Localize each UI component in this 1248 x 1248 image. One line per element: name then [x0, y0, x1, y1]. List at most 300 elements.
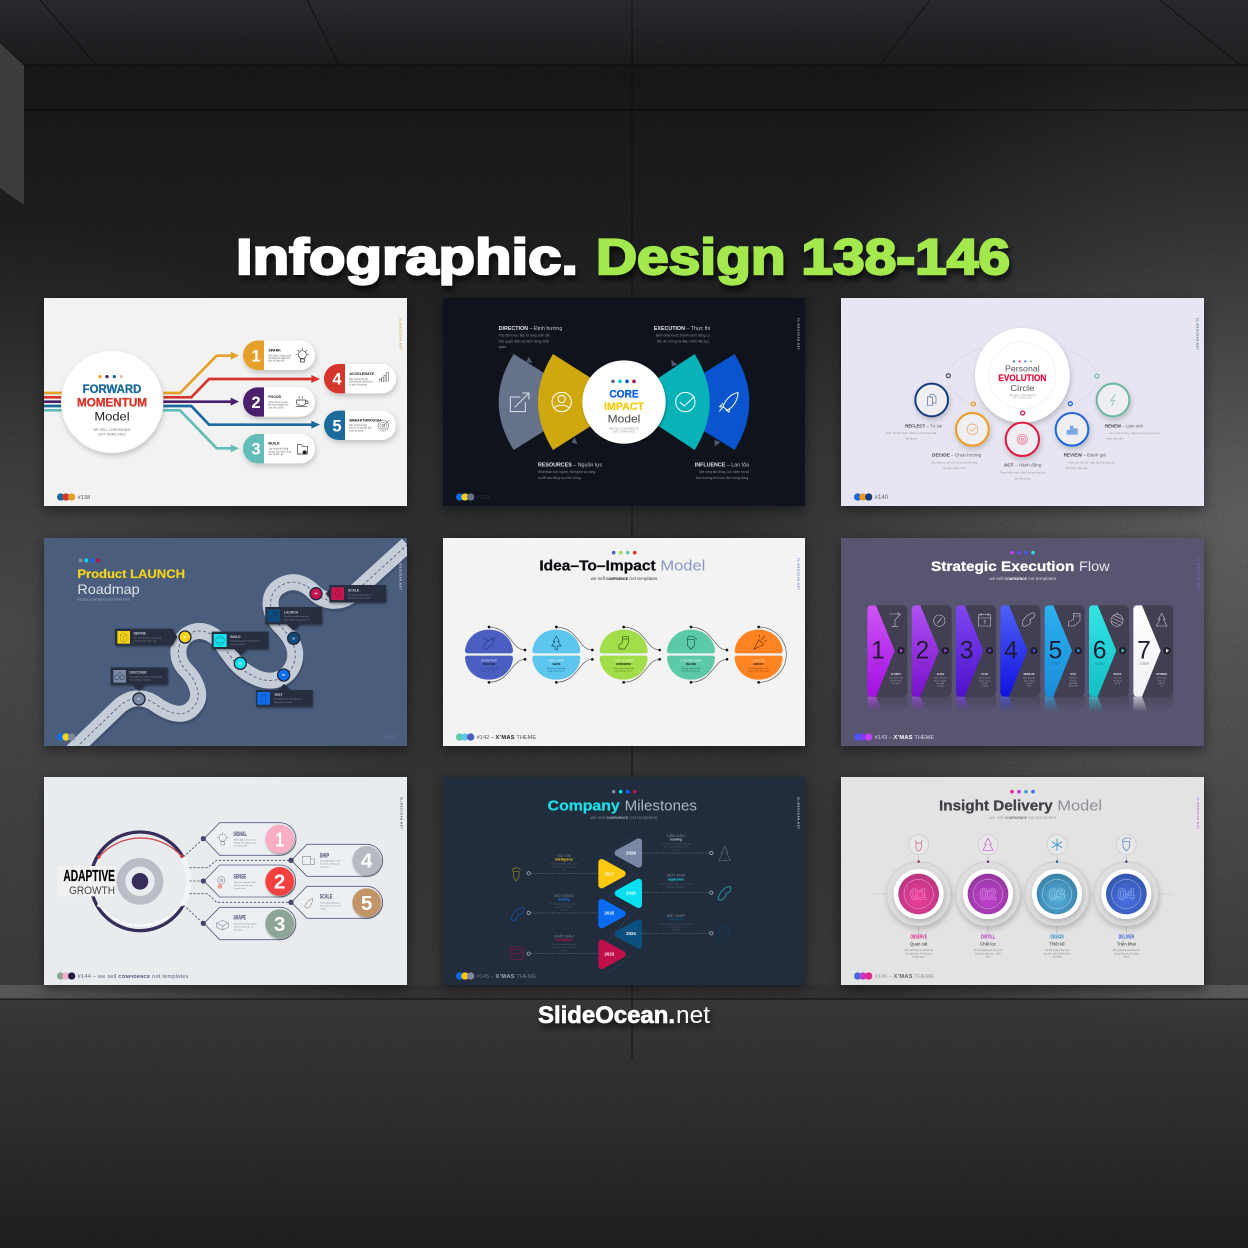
orbit ellipse [947, 343, 1097, 413]
heading: Model [660, 558, 705, 574]
panel 146: Insight Delivery Model [841, 777, 1204, 985]
footer id [57, 733, 397, 741]
panel 140: Personal Evolution Circle [841, 298, 1204, 506]
stage 03 design: 03 [1048, 887, 1066, 904]
panel 143: Strategic Execution Flow [841, 538, 1204, 746]
step 7: 7 [1137, 638, 1151, 665]
step 7: trình sau [1158, 679, 1166, 682]
step build: BUILD [230, 635, 241, 639]
stage 04 deliver [1094, 835, 1158, 959]
step 6 [1089, 605, 1129, 697]
stage 03 design [1025, 835, 1089, 959]
step 3 build: 3 [251, 440, 261, 459]
reflect node [886, 384, 948, 441]
step 1: Làm rõ mục tiêu [889, 677, 903, 680]
stage 2: pháp có cấu trúc rõ [549, 670, 564, 673]
central circle: IMPACT [604, 401, 644, 413]
stage 3 [600, 626, 661, 684]
step scale: SCALE [348, 589, 360, 593]
connecting line [873, 893, 1172, 895]
step 5 [1045, 605, 1085, 697]
milestone 2024: BẮT NHỊP [667, 913, 686, 918]
milestone 2023 [511, 933, 622, 966]
step 7: STEP [1140, 662, 1150, 666]
step 3 build [243, 434, 315, 463]
footer id: #140 [875, 495, 889, 501]
renew node: RENEW – Làm mới [1105, 424, 1143, 429]
step 5 scale: hiệu quả và tối ưu hệ [320, 904, 341, 907]
step 2 sense: sự phía sau [234, 888, 246, 890]
step 5: thống nhất [1068, 685, 1078, 688]
orbit nodes [946, 374, 1099, 415]
milestone 2027: SỰ TIN [557, 853, 571, 858]
step 4 accelerate: ACCELERATE [349, 372, 375, 376]
milestone 2026: expansion [668, 877, 684, 881]
brand vertical text: SLIDEOCEAN.NET [1196, 318, 1199, 350]
step 4: thiết [1027, 685, 1031, 688]
central circle: WE SELL CONFIDENCE [609, 426, 639, 430]
heading: Milestones [625, 798, 697, 814]
step 5 scale: SCALE [320, 894, 332, 901]
step 6: chỉ số [1115, 682, 1121, 685]
title [236, 229, 1010, 285]
footer id [57, 972, 189, 980]
central circle [61, 351, 163, 453]
direction text: DIRECTION – Định hướng [499, 326, 562, 332]
central circle: NOT TEMPLATES [613, 430, 635, 434]
central circle [975, 328, 1070, 423]
footer id [854, 493, 889, 501]
influence text: INFLUENCE – Lan tỏa [695, 461, 749, 468]
brand vertical text: SLIDEOCEAN.NET [797, 318, 800, 350]
act node: Thực hiện nhất quán những việc tạo [1000, 471, 1046, 475]
step 1 spark [243, 341, 315, 370]
stage 03 design: tác động [1053, 956, 1062, 959]
step 2: hướng [937, 686, 943, 688]
footer id [57, 493, 90, 501]
stage 04 deliver: được [1124, 956, 1130, 959]
panel 144: Adaptive Growth [44, 777, 407, 985]
heading [939, 790, 1102, 820]
resources text: cụ để tạo động lực bền vững. [538, 476, 582, 480]
step build: Xây dựng nguyên mẫu, kiểm thử [230, 640, 260, 643]
panel 145: Company Milestones [443, 777, 805, 985]
milestone 2023: foundation [555, 938, 573, 942]
step 1 signal: SIGNAL [233, 831, 247, 838]
step 1 spark: tạo động lực đầu tiên [268, 357, 291, 360]
step 5 breakthrough: BREAKTHROUGH [349, 418, 381, 422]
stage 02 distill [956, 835, 1020, 959]
title: Product LAUNCH [77, 567, 185, 581]
step 5 scale: 5 [361, 892, 372, 915]
central circle: Model [94, 409, 130, 423]
road milestones: 05 [292, 636, 296, 640]
title [77, 558, 185, 602]
step 2: bên và nguồn [934, 679, 946, 682]
step 7: OPTIMIZE [1156, 674, 1168, 676]
footer id: #146 – X'MAS THEME [875, 974, 934, 980]
stage 01 observe [887, 835, 951, 959]
step 5 scale: Nhân rộng những gì [320, 901, 340, 904]
footer id: #139 [477, 495, 489, 501]
resources text [538, 462, 603, 480]
step 3 [956, 605, 996, 697]
act node: ACT – Hành động [1004, 463, 1042, 468]
step 4 ship [288, 844, 383, 876]
heading: Strategic Execution [931, 558, 1074, 574]
step 6: tiến độ và [1113, 679, 1123, 682]
stage 02 distill: 02 [979, 887, 997, 904]
step 7: kỳ [1161, 686, 1163, 688]
step 1: 1 [871, 638, 885, 665]
milestone 2025: MỞ RỘNG [554, 893, 574, 898]
step 2: STEP [918, 662, 928, 666]
brand vertical text: SLIDEOCEAN.NET [399, 318, 402, 350]
milestone 2027 [512, 853, 622, 885]
step 1 spark: SPARK [268, 348, 281, 352]
step 1 spark: cho sự thay đổi [268, 360, 285, 363]
step discover: DISCOVER [129, 671, 147, 675]
step 5 breakthrough: hạn cũ và tạo kết quả [349, 427, 372, 430]
step 5: theo kế [1070, 679, 1077, 682]
step 6: Theo dõi [1113, 677, 1122, 680]
milestone 2027: 2027 [605, 871, 615, 876]
milestone 2025: 2025 [605, 911, 615, 916]
dashed connectors [183, 839, 291, 923]
review node: REVIEW – Đánh giá [1064, 453, 1106, 458]
milestone 2026 [618, 873, 731, 905]
step 5 scale: thống [320, 907, 327, 910]
step test: TEST [274, 693, 283, 697]
brand vertical text: SLIDEOCEAN.NET [399, 558, 402, 590]
timeline track [598, 836, 633, 974]
step 2 focus [243, 387, 315, 417]
stage 02 distill: Chắt lọc [980, 942, 997, 947]
act node [1000, 423, 1046, 480]
step 3: 3 [960, 638, 974, 665]
brand vertical text: SLIDEOCEAN.NET [796, 797, 799, 829]
step 1: STEP [874, 662, 884, 666]
step 1 spark: 1 [251, 346, 261, 365]
step build: nhanh và cải tiến [230, 643, 245, 646]
stage 1: KHÁM PHÁ [481, 659, 497, 663]
footer id: #138 [78, 495, 90, 501]
heading [539, 551, 705, 581]
step 4 accelerate: mở rộng tác động thực [349, 381, 374, 384]
step 2 sense: Hiểu sâu nguyên nhân [234, 881, 256, 884]
footer id [854, 733, 934, 741]
step 3 build: cho cả đội ngũ [268, 453, 284, 456]
step 2 [912, 605, 952, 697]
step 2 sense: SENSE [233, 873, 246, 880]
stage 01 observe: Theo dõi hành vi, dữ liệu và [904, 949, 934, 952]
milestone 2024: market fit [669, 918, 684, 922]
step 3: STEP [962, 662, 972, 666]
footer id: #144 – we sell CONFIDENCE not templates [78, 974, 189, 980]
step 2 focus: FOCUS [268, 395, 282, 399]
stage 1 [465, 626, 526, 684]
heading: Flow [1079, 558, 1111, 574]
step 3 build: Xây dựng hệ thống [268, 448, 289, 451]
title: WE SELL CONFIDENCE NOT TEMPLATES [77, 598, 130, 602]
direction text: mọi quyết định và hành động nhất [499, 339, 549, 343]
heading: Company [548, 798, 621, 814]
brand vertical text: SLIDEOCEAN.NET [399, 797, 402, 829]
milestone 2028: Trở thành thương hiệu dẫn đầu [661, 842, 692, 845]
milestone 2027: định nhanh và chính xác [552, 866, 577, 869]
stage 03 design: hợp nhu cầu, khả thi và có [1043, 952, 1071, 955]
review node [1056, 413, 1115, 470]
step discover: Lắng nghe thị trường và khách hàng, [129, 675, 163, 678]
panel 141: Product Launch Roadmap [44, 538, 407, 746]
decide node [931, 413, 989, 470]
step 1 signal: 1 [275, 828, 284, 851]
stage 03 design: Thiết kế [1049, 942, 1065, 947]
step 4 accelerate: tế trên thị trường [349, 383, 367, 386]
central circle: EVOLUTION [998, 373, 1046, 383]
step test: Thử nghiệm với người dùng, đo [274, 698, 303, 701]
blade icons [510, 392, 738, 412]
title block: GROWTH [69, 885, 115, 897]
title block: ADAPTIVE [63, 868, 115, 885]
stage 01 observe: bối cảnh thực tế một cách [905, 952, 933, 955]
step 6: 6 [1093, 638, 1107, 665]
step 4 accelerate: 4 [332, 370, 342, 389]
step 4: lực cần [1026, 682, 1032, 685]
step build [212, 632, 268, 655]
stage 5: AMPLIFY [754, 663, 764, 666]
step 3 shape: hợp với năng lực và [234, 925, 254, 928]
stage 02 distill: DISTILL [981, 934, 995, 940]
central circle: WE SELL CONFIDENCE [93, 428, 131, 432]
road milestones: 04 [282, 673, 286, 677]
step launch: LAUNCH [284, 610, 299, 614]
footer id: #142 – X'MAS THEME [477, 735, 536, 741]
milestone 2024 [618, 913, 728, 945]
step 7: Tối ưu quy [1157, 677, 1166, 680]
step 5 scale [288, 886, 383, 918]
act node: tác động cao [1015, 476, 1031, 480]
stage 5: Mở rộng tác động và lan [749, 667, 769, 670]
step 2 sense: gốc và nhu cầu thực [234, 884, 254, 887]
step 3 shape: 3 [274, 913, 285, 936]
central circle: NOT TEMPLATES [98, 432, 126, 436]
step 4 [1000, 605, 1040, 697]
milestone 2024: và thị trường mục tiêu [665, 926, 687, 929]
review node: Kiểm tra tiến độ, hiệu quả và mức độ [1068, 460, 1115, 464]
execution text: EXECUTION – Thực thi [654, 326, 710, 332]
stage 01 observe: Quan sát [910, 942, 928, 947]
renew node: Làm mới tư duy, năng lượng và phương [1109, 431, 1160, 435]
stage 2: ĐỊNH HÌNH [549, 659, 564, 663]
execution text: Biến chiến lược thành hành động cụ [656, 334, 710, 338]
influence text [695, 461, 749, 480]
central circle: CORE [609, 388, 639, 400]
brand vertical text: SLIDEOCEAN.NET [1196, 558, 1199, 590]
step 6: TRACK [1113, 673, 1122, 676]
footer id: #141 [384, 735, 397, 741]
step 1: CLARIFY [891, 673, 901, 676]
step 2 focus: Chọn đúng ưu tiên, [268, 401, 289, 404]
reflect node: REFLECT – Tự soi [905, 424, 942, 429]
renew node: pháp tiếp cận [1106, 437, 1123, 441]
winding road [72, 545, 408, 754]
central circle: MOMENTUM [77, 396, 147, 410]
panel 139: Core Impact Model [443, 298, 805, 506]
influence text: ảnh hưởng tích cực đến cộng đồng. [696, 476, 749, 480]
decide node: Xác định ưu tiên và hướng đi rõ ràng [931, 460, 978, 464]
step 4 accelerate [324, 364, 396, 393]
step test: lường và hoàn thiện [274, 701, 292, 704]
target rings [91, 832, 189, 931]
stage 3: THỬ NGHIỆM [614, 658, 634, 663]
milestone 2024: ban đầu [672, 929, 681, 932]
stage 2: Biến ý tưởng thành giải [547, 667, 566, 670]
reflect node: Nhìn lại bản thân, hành vi và kết quả đã [886, 431, 936, 435]
step 4 ship: SHIP [320, 852, 329, 859]
stage 04 deliver: Triển khai [1117, 942, 1136, 947]
title: Roadmap [77, 581, 140, 597]
step 3: rõ ràng [981, 685, 988, 688]
step 1: và thách thức [890, 679, 902, 682]
milestone 2027: Ứng dụng dữ liệu để ra quyết [550, 863, 579, 866]
central circle: NOT TEMPLATES [1013, 397, 1032, 400]
step scale: Mở rộng thị trường, tối ưu [348, 593, 371, 596]
footer id [456, 972, 536, 980]
stage 3: lường kết quả thực tế [615, 670, 632, 673]
stage 02 distill: tầng [986, 956, 991, 959]
step discover: tìm ra những cơ hội mới [129, 679, 151, 682]
step 4: MOBILIZE [1023, 674, 1035, 676]
step 1 spark: Khơi dậy ý tưởng mới [268, 354, 292, 357]
resources text: RESOURCES – Nguồn lực [538, 462, 603, 468]
stage 4: DELIVER [686, 664, 696, 666]
footer id: #145 – X'MAS THEME [477, 974, 536, 980]
milestone 2025: toàn bộ [560, 909, 568, 912]
step 5 breakthrough: 5 [332, 416, 342, 435]
stage 4: tiễn một cách hiệu quả [682, 670, 701, 673]
step test [256, 684, 313, 707]
renew node [1097, 384, 1160, 441]
step 3 shape: bối cảnh [234, 928, 243, 931]
heading: we sell CONFIDENCE not templates [989, 815, 1057, 820]
step 4 accelerate: Đẩy nhanh tốc độ, [349, 378, 369, 381]
stage 4: Đưa giải pháp vào thực [681, 667, 701, 670]
title: Infographic. [236, 229, 578, 285]
fan blades [499, 354, 749, 450]
direction text: Xác định mục tiêu rõ ràng, dẫn dắt [499, 333, 550, 338]
footer id [456, 733, 536, 741]
step discover [111, 667, 168, 691]
step 2 focus: 2 [251, 393, 261, 412]
milestone 2028: thị trường và tạo tầm ảnh [664, 845, 689, 848]
step 3 shape: Định hình hướng đi phù [234, 922, 258, 925]
milestone 2028 [618, 833, 731, 864]
step define: DEFINE [134, 632, 147, 636]
heading: Model [1057, 798, 1102, 814]
stage 5: LAN TỎA [752, 658, 765, 663]
panel 138: Forward Momentum Model [44, 298, 407, 506]
step define: cho sản phẩm sắp ra mắt [134, 640, 157, 643]
milestone 2025: scaling [558, 898, 570, 902]
milestone 2028: 2028 [626, 851, 636, 856]
step define [115, 629, 177, 645]
step scale [326, 585, 386, 602]
influence text: Mở rộng tác động, lực niềm tin và [699, 470, 749, 474]
title: Design 138-146 [596, 229, 1010, 285]
step 2: 2 [915, 638, 929, 665]
direction text: quán. [499, 345, 507, 349]
milestone 2028: leading [670, 838, 682, 842]
step 4 ship: Đưa giải pháp ra thực [320, 860, 342, 863]
step 2 sense: 2 [274, 871, 285, 894]
heading: Idea–To–Impact [539, 558, 656, 574]
step 1: cần xử lý [892, 682, 900, 685]
road milestones: 03 [239, 661, 242, 665]
milestone 2025: Mở rộng hoạt động và tối ưu [550, 903, 578, 906]
step 5 breakthrough [324, 411, 396, 440]
step 4: Huy động đội [1023, 677, 1035, 680]
step 1 signal: trường và KH [234, 844, 247, 847]
step 1 [867, 605, 907, 697]
stage 03 design: DESIGN [1050, 934, 1064, 940]
milestone 2028: hưởng [673, 848, 680, 851]
heading: Insight Delivery [939, 798, 1054, 814]
step 2: lực cùng [936, 683, 944, 685]
milestone 2026: Mở rộng thị trường và nâng tầm [661, 882, 692, 885]
brand vertical text: SLIDEOCEAN.NET [796, 558, 799, 590]
step 1 signal: Nhận diện tín hiệu nhỏ [234, 838, 257, 841]
stage 1: nghe và đặt câu hỏi [481, 670, 498, 673]
step 3 build: BUILD [268, 442, 280, 446]
step 4: ngũ và năng [1023, 679, 1035, 682]
stage 4: CHUYỂN GIAO [680, 658, 702, 663]
central circle [582, 360, 666, 444]
step scale: vận hành và tăng trưởng [348, 597, 370, 600]
step 5 breakthrough: vượt kỳ vọng [349, 429, 364, 432]
step 3 shape [201, 907, 296, 940]
road milestones: 06 [315, 592, 318, 596]
step 2 focus: tập trung nguồn lực [268, 404, 289, 407]
step 6: STEP [1095, 662, 1105, 666]
resources text: Khai thác con người, thời gian và công [538, 470, 595, 474]
stage 3: Kiểm chứng nhanh và đo [613, 667, 634, 670]
stage 1: Quan sát thị trường, lắng [479, 667, 499, 670]
step 2: ALIGN [937, 673, 944, 676]
stage 3: EXPERIMENT [616, 664, 632, 666]
stage 04 deliver: và tạo kết quả đo lường [1114, 952, 1139, 955]
execution text [654, 326, 710, 343]
milestone 2027: hơn [562, 870, 567, 872]
stage 04 deliver: Đưa giải pháp vào thực tế [1113, 949, 1141, 952]
heading: we sell CONFIDENCE not templates [591, 815, 658, 820]
road milestones [133, 588, 322, 705]
milestone 2023: Đặt nền móng về tầm nhìn, [551, 943, 577, 946]
execution text: thể, đo lường và điều chỉnh liên tục. [657, 339, 710, 343]
stage 04 deliver: DELIVER [1119, 934, 1134, 940]
milestone 2023: con người và chiến lược [552, 946, 577, 949]
decide node: cho giai đoạn mới [943, 466, 966, 470]
step 5: Triển khai [1069, 677, 1078, 680]
footer id [456, 493, 489, 501]
panel 142: Idea-To-Impact Model [443, 538, 805, 746]
stage 02 distill: Rút ra insight quan trọng từ [974, 949, 1003, 952]
central circle: Model [608, 413, 640, 425]
road milestones: 02 [184, 635, 187, 639]
stage 1: DISCOVER [483, 664, 495, 666]
step 7 [1133, 605, 1173, 697]
heading [548, 790, 697, 820]
